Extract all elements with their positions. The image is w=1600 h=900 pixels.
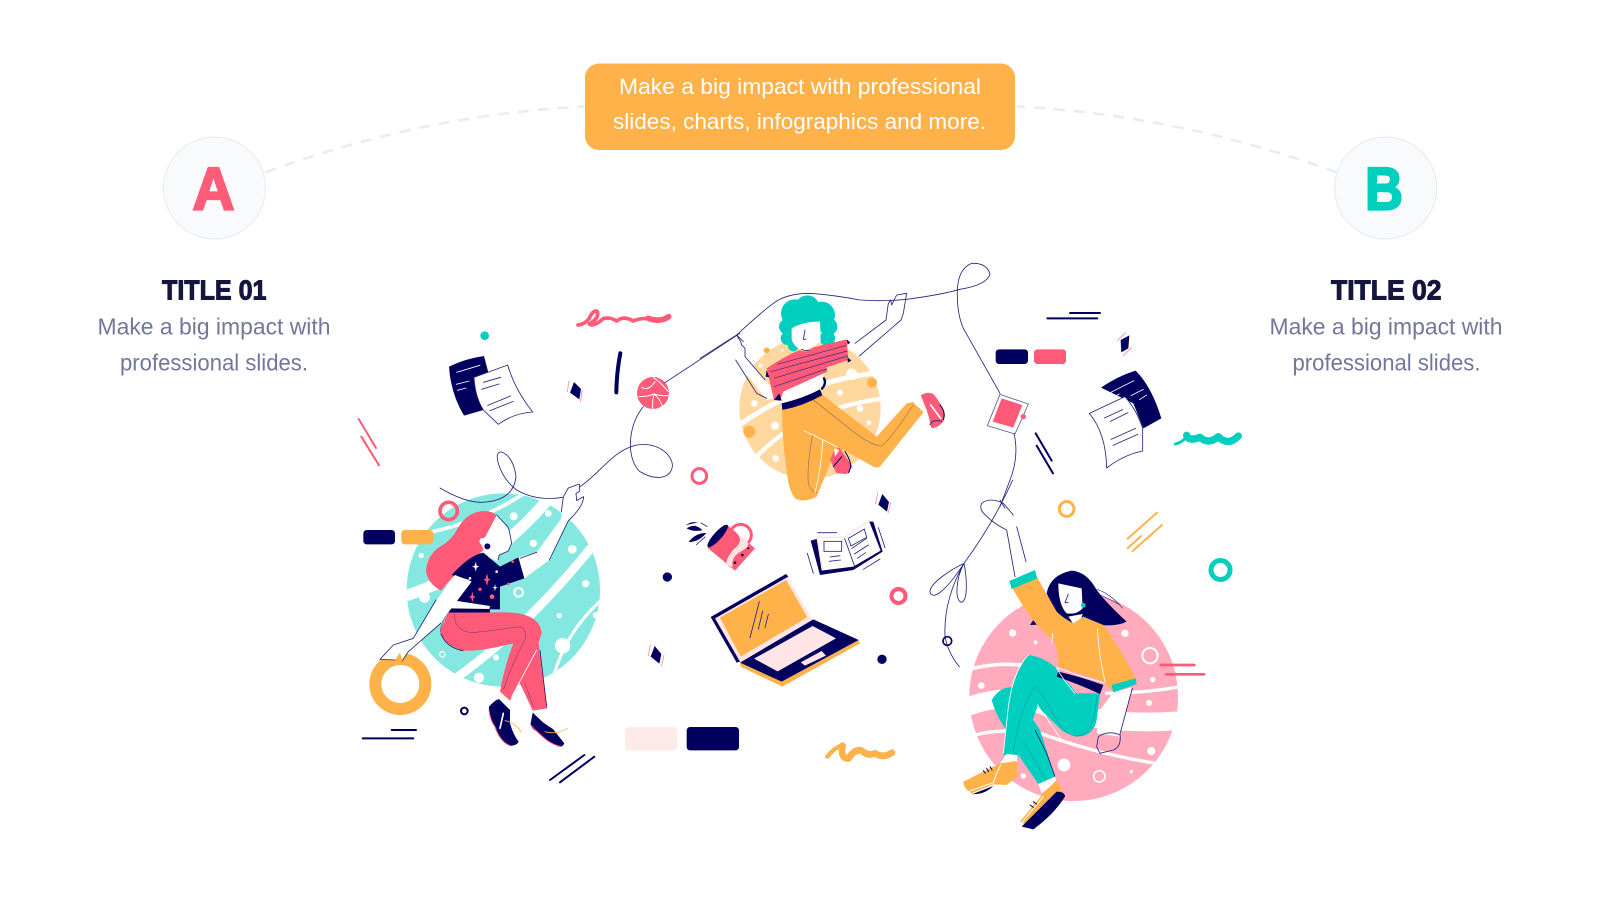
figure: pants: [1003, 655, 1100, 755]
text block: title 01 description: [98, 314, 330, 376]
shoe: right: [531, 713, 567, 747]
figure: belt: [1057, 672, 1103, 694]
strokes: pink: [1161, 665, 1204, 674]
figure: sweater folds: [1052, 628, 1105, 682]
shoe: back: [830, 448, 853, 474]
icon: letter B badge: [1335, 137, 1437, 239]
illustration: upper-left decorations: [359, 311, 707, 483]
figure: belt: [782, 389, 823, 410]
shoe: left: [489, 699, 522, 746]
figure: hair: [779, 295, 837, 351]
figure: pant seams: [441, 613, 547, 707]
icon: diamond: [567, 381, 582, 402]
squiggle: pink: [578, 311, 669, 325]
figure: belly: [782, 373, 824, 403]
badges: [996, 349, 1066, 364]
figure: hair: [426, 511, 497, 591]
text block: title 02 description: professional slides.: [1292, 350, 1480, 376]
callout: top banner: [585, 64, 1015, 150]
string: lower: [1000, 433, 1016, 507]
figure: shirt: [766, 339, 851, 401]
strokes: navy lines: [363, 730, 594, 782]
card: pink tile: [987, 394, 1028, 434]
figure: face: [1058, 583, 1086, 624]
figure: raised arm and hand: [981, 500, 1026, 577]
heading: title 01: TITLE 01: [162, 274, 266, 306]
badge: pale: [625, 727, 677, 750]
strokes: pink diagonal: [359, 419, 379, 465]
figure: belt: [448, 608, 490, 613]
heading: title 02: TITLE 02: [1331, 274, 1442, 306]
squiggle: teal: [1175, 435, 1238, 444]
squiggle: orange: [827, 745, 892, 759]
planet: teal: [403, 490, 603, 690]
text block: title 02 description: [1270, 314, 1502, 376]
icon: documents: [1089, 371, 1161, 468]
shoe: front: [913, 393, 945, 428]
figure: belly: [452, 601, 490, 609]
icon: open book: [807, 521, 885, 575]
ring: orange: [1059, 502, 1074, 516]
icon: diamond: [1117, 333, 1132, 356]
figure: sweater: [1012, 577, 1137, 692]
dot: teal: [480, 331, 489, 340]
badge: navy: [687, 727, 739, 750]
string: bow: [930, 480, 1013, 667]
strokes: orange: [1128, 513, 1162, 551]
panel: title B: [1270, 137, 1502, 376]
text block: title 02 description: Make a big impact with: [1270, 314, 1502, 340]
figure: left arm: [736, 335, 780, 400]
figure: face: [792, 322, 821, 350]
icon: diamond upper: [876, 493, 891, 513]
figure: pant seams: [804, 400, 913, 493]
dashed connector: left: [266, 106, 585, 172]
panel: title A: [98, 137, 330, 376]
figure: pants: [440, 612, 542, 701]
dashed connector: right: [1017, 106, 1337, 172]
icon: documents: [449, 356, 533, 424]
figure: trouser seams: [1003, 655, 1104, 782]
text block: title 01 description: Make a big impact with: [98, 314, 330, 340]
icon: laptop: [711, 574, 860, 687]
shoe: right: [1020, 777, 1065, 829]
bar: navy stroke: [616, 353, 620, 392]
icon: mug: [687, 522, 755, 571]
figure: raised arm: [518, 484, 584, 578]
figure: cuffs: [1009, 570, 1137, 692]
illustration: centre objects: [625, 493, 892, 759]
illustration: woman B: [930, 480, 1204, 829]
ring: pink: [692, 469, 707, 483]
illustration: right decorations: [987, 313, 1238, 507]
figure: right arm: [1097, 687, 1132, 753]
ring: teal: [1211, 560, 1230, 580]
figure: right arm: [847, 293, 907, 356]
ring: pink middle: [892, 589, 906, 603]
pink ring: [440, 502, 457, 520]
figure: left arm: [380, 575, 472, 662]
callout: top banner: Make a big impact with professional: [619, 74, 981, 99]
icon: letter A badge: [164, 137, 266, 239]
ring: orange: [375, 659, 425, 709]
figure: back leg: [520, 643, 547, 711]
dot: navy right: [877, 655, 887, 664]
string: centre: [700, 263, 1000, 393]
figure: back leg: [992, 687, 1055, 784]
figure: pants: [782, 395, 924, 500]
strokes: navy: [1036, 433, 1053, 473]
string: left: [440, 333, 740, 502]
illustration: woman A: [363, 484, 603, 782]
illustration: woman centre: [700, 263, 1000, 500]
callout: top banner: slides, charts, infographics and more.: [613, 109, 986, 134]
icon: letter A badge: A: [192, 156, 234, 222]
figure: shirt: [452, 553, 524, 609]
icon: letter B badge: B: [1365, 156, 1403, 222]
badges: [363, 530, 433, 544]
dot: navy left: [663, 572, 672, 582]
figure: face: [479, 515, 513, 562]
ring: navy small: [461, 708, 468, 714]
icon: diamond left: [648, 645, 664, 666]
text block: title 01 description: professional slides.: [120, 350, 308, 376]
ball: pink yarn: [637, 377, 669, 409]
planet: pink: [963, 590, 1187, 803]
planet: cream: [737, 337, 883, 480]
shoe: left: [963, 754, 1017, 794]
figure: hair: [1030, 571, 1127, 625]
strokes: navy top: [1047, 313, 1100, 318]
figure: hair strands: [1097, 589, 1123, 608]
